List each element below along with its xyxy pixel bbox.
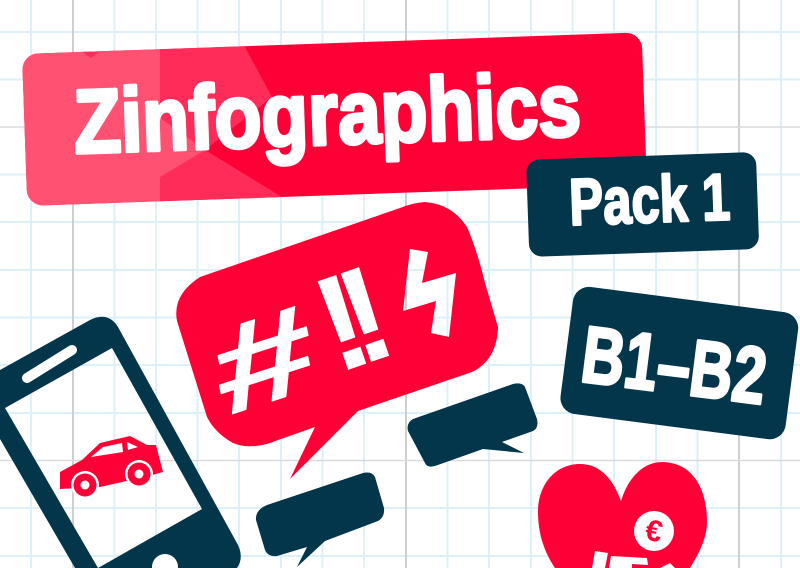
lightning bolt — [403, 249, 456, 337]
pack label — [526, 152, 759, 257]
small speech bubble, bottom — [256, 472, 384, 567]
phone body with screen hole — [0, 317, 241, 568]
exclamation marks: !! — [296, 239, 400, 401]
euro coin: € — [642, 514, 666, 549]
heart shape — [538, 462, 707, 568]
icon: car — [60, 436, 163, 499]
pack label: Pack 1 — [568, 159, 731, 239]
large red speech bubble — [176, 202, 498, 479]
heart — [538, 462, 707, 568]
title banner — [22, 32, 646, 206]
bubble shape — [176, 202, 498, 479]
smartphone — [0, 317, 241, 568]
small speech bubble, right — [408, 383, 538, 467]
title text: Zinfographics — [72, 55, 582, 173]
white figure at bottom of heart — [592, 551, 675, 568]
banner shape with facets — [22, 32, 646, 206]
home button — [152, 554, 178, 568]
speaker slot — [27, 350, 72, 378]
hash symbol: # — [201, 278, 327, 443]
euro coin — [634, 511, 674, 551]
